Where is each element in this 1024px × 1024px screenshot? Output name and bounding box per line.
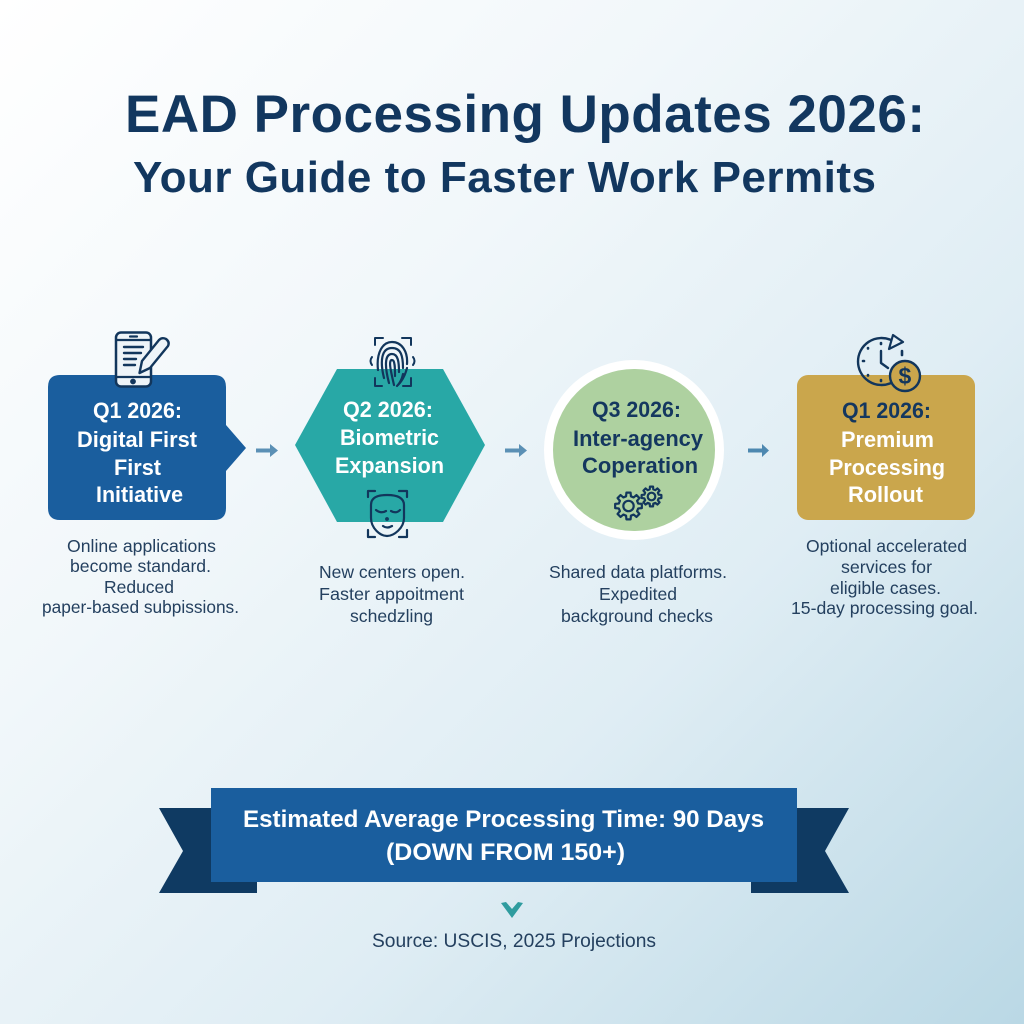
- description: [791, 536, 978, 618]
- description: [42, 536, 239, 617]
- description: Reduced: [104, 577, 174, 597]
- card heading: [829, 398, 945, 507]
- description: Online applications: [67, 536, 216, 556]
- description: schedzling: [350, 606, 433, 626]
- banner text: (DOWN FROM 150+): [386, 839, 625, 866]
- panel: Q3 inter-agency: [548, 364, 727, 626]
- icon: face scan: [368, 491, 407, 537]
- banner text: [243, 806, 764, 866]
- icon: chevron: [501, 902, 523, 918]
- arrow 1: [256, 444, 278, 457]
- hexagon heading: Q2 2026:: [343, 397, 433, 422]
- description: [549, 562, 727, 626]
- panel: Q1 digital first: [42, 332, 246, 617]
- icon: clock and dollar: [858, 335, 920, 391]
- hexagon shape: [295, 369, 485, 522]
- circle heading: Q3 2026:: [592, 397, 681, 422]
- icon: clock and dollar: $: [898, 363, 912, 389]
- panel: Q1 premium processing: [791, 335, 978, 618]
- ribbon tails: [159, 808, 849, 893]
- circle heading: [573, 397, 704, 478]
- card heading: Premium: [841, 427, 934, 452]
- card heading: Processing: [829, 455, 945, 480]
- arrow 3: [748, 444, 769, 457]
- panel: Q2 biometric: [295, 338, 485, 626]
- description: background checks: [561, 606, 713, 626]
- banner text: Estimated Average Processing Time: 90 Days: [243, 806, 764, 833]
- card heading: [77, 398, 198, 507]
- hexagon heading: Biometric: [340, 425, 439, 450]
- description: [319, 562, 465, 626]
- description: New centers open.: [319, 562, 465, 582]
- hexagon heading: [335, 397, 444, 478]
- icon: phone and pencil: [116, 332, 169, 386]
- description: 15-day processing goal.: [791, 598, 978, 618]
- description: Shared data platforms.: [549, 562, 727, 582]
- circle heading: Inter-agency: [573, 426, 704, 451]
- card shape: [797, 375, 975, 520]
- circle shape: [548, 364, 720, 536]
- description: become standard.: [70, 556, 211, 576]
- title: EAD Processing Updates 2026:: [125, 85, 925, 144]
- description: Optional accelerated: [806, 536, 967, 556]
- arrow 2: [505, 444, 527, 457]
- description: services for: [841, 557, 932, 577]
- card heading: Q1 2026:: [842, 398, 931, 423]
- description: Expedited: [599, 584, 677, 604]
- icon: fingerprint: [370, 338, 414, 386]
- card heading: First: [114, 455, 162, 480]
- description: paper-based subpissions.: [42, 597, 239, 617]
- icon: gears: [615, 487, 661, 519]
- title: [125, 85, 925, 202]
- source note: Source: USCIS, 2025 Projections: [372, 931, 656, 952]
- card heading: Digital First: [77, 427, 198, 452]
- ribbon body: [211, 788, 797, 882]
- card shape: [48, 375, 246, 520]
- description: Faster appoitment: [319, 584, 464, 604]
- card heading: Initiative: [96, 482, 183, 507]
- hexagon heading: Expansion: [335, 453, 444, 478]
- description: eligible cases.: [830, 578, 941, 598]
- title: Your Guide to Faster Work Permits: [133, 153, 876, 202]
- banner: [159, 788, 849, 893]
- circle heading: Coperation: [582, 453, 698, 478]
- card heading: Q1 2026:: [93, 398, 182, 423]
- card heading: Rollout: [848, 482, 924, 507]
